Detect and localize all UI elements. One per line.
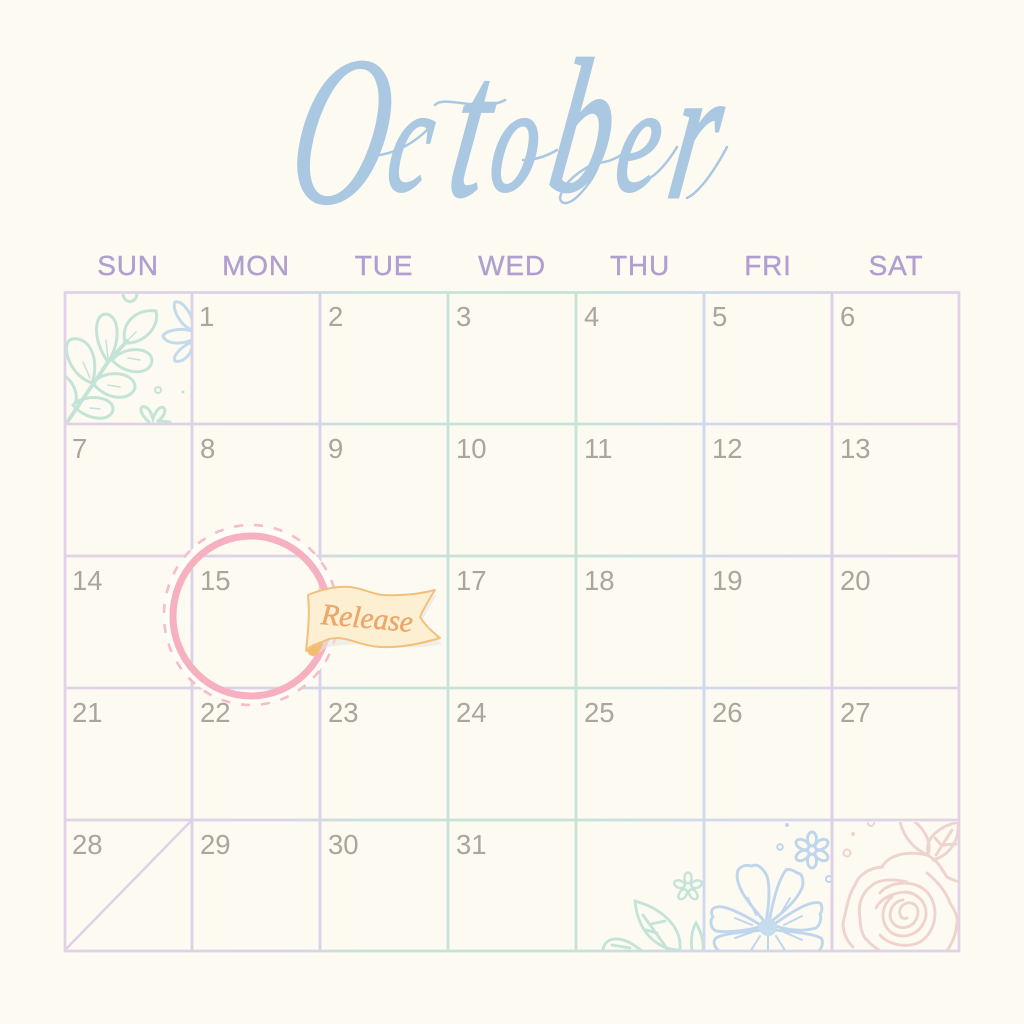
date numbers: 12 — [712, 433, 743, 464]
date numbers: 7 — [72, 433, 87, 464]
date numbers: 27 — [840, 697, 871, 728]
release banner flag — [306, 587, 442, 658]
date numbers: 31 — [456, 829, 487, 860]
weekday headers: FRI — [744, 250, 792, 281]
weekday headers: SAT — [869, 250, 923, 281]
title: O — [275, 12, 410, 251]
date numbers: 13 — [840, 433, 871, 464]
date numbers: 21 — [72, 697, 103, 728]
weekday headers: MON — [222, 250, 290, 281]
date numbers: 24 — [456, 697, 487, 728]
calendar grid — [64, 292, 960, 952]
date numbers: 11 — [584, 433, 613, 464]
title: r — [657, 28, 738, 239]
date numbers: 28 — [72, 829, 103, 860]
weekday headers: TUE — [355, 250, 413, 281]
weekday headers — [97, 250, 923, 281]
date numbers: 23 — [328, 697, 359, 728]
date numbers: 20 — [840, 565, 871, 596]
icon: leaf sprig corner — [66, 294, 193, 422]
date numbers: 17 — [456, 565, 487, 596]
title: t — [437, 18, 510, 239]
date numbers: 19 — [712, 565, 743, 596]
date numbers: 9 — [328, 433, 343, 464]
date numbers: 26 — [712, 697, 743, 728]
date numbers: 15 — [200, 565, 231, 596]
date numbers: 22 — [200, 697, 231, 728]
date numbers: 6 — [840, 301, 855, 332]
date numbers: 2 — [328, 301, 343, 332]
title: c — [378, 58, 446, 223]
release label: Release — [319, 598, 414, 639]
date numbers: 25 — [584, 697, 615, 728]
date numbers: 4 — [584, 301, 599, 332]
date numbers: 14 — [72, 565, 103, 596]
date numbers: 5 — [712, 301, 727, 332]
date numbers — [72, 301, 871, 860]
highlight circle around 15 — [164, 525, 338, 705]
title: e — [607, 58, 674, 223]
date numbers: 8 — [200, 433, 215, 464]
title: b — [538, 21, 631, 232]
title: o — [481, 58, 554, 223]
date numbers: 30 — [328, 829, 359, 860]
icon: green flower and leaves — [603, 872, 703, 952]
weekday headers: THU — [610, 250, 670, 281]
title flourishes — [380, 100, 727, 203]
weekday headers: SUN — [97, 250, 159, 281]
date numbers: 18 — [584, 565, 615, 596]
title — [275, 12, 740, 251]
icon: blue flowers — [711, 823, 832, 952]
weekday headers: WED — [478, 250, 546, 281]
date numbers: 29 — [200, 829, 231, 860]
date numbers: 10 — [456, 433, 487, 464]
icon: rose — [843, 820, 960, 951]
date numbers: 1 — [199, 301, 214, 332]
date numbers: 3 — [456, 301, 471, 332]
